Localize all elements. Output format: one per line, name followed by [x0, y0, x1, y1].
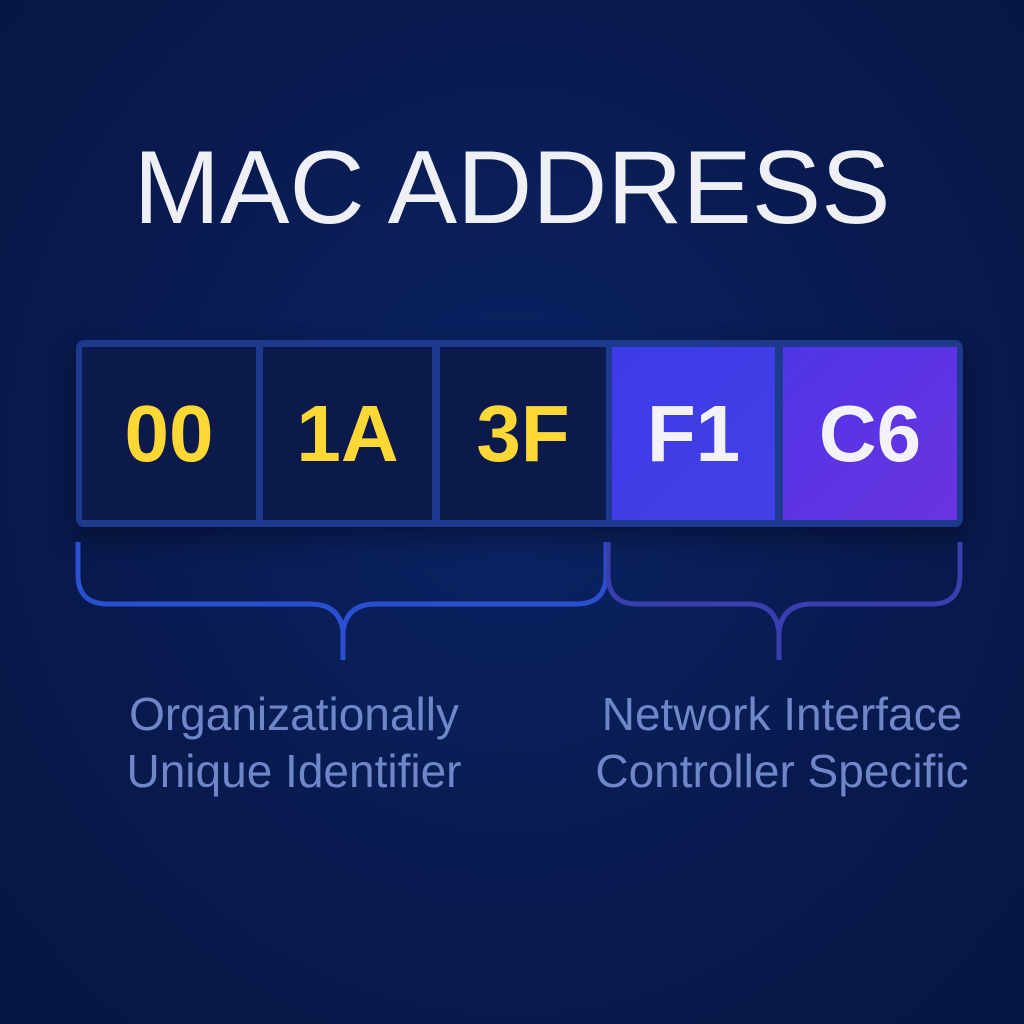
byte C6 [783, 347, 957, 520]
brace: OUI [78, 542, 606, 660]
byte 3F: 3F [476, 388, 570, 478]
label: OUI: Organizationally [129, 688, 459, 740]
label: NIC: Network Interface [602, 688, 962, 740]
panel: address bytes [76, 340, 963, 527]
byte F1: F1 [647, 388, 740, 478]
byte 1A: 1A [296, 388, 399, 478]
brace: NIC [608, 542, 960, 660]
title: MAC ADDRESS [133, 130, 891, 246]
label: OUI [126, 688, 461, 797]
byte 00 [82, 347, 256, 520]
byte C6: C6 [819, 388, 921, 478]
label: OUI: Unique Identifier [126, 745, 461, 797]
byte 1A [263, 347, 432, 520]
label: NIC [595, 688, 969, 797]
label: NIC: Controller Specific [595, 745, 969, 797]
byte F1 [612, 347, 775, 520]
byte 00: 00 [124, 388, 213, 478]
byte 3F [440, 347, 606, 520]
